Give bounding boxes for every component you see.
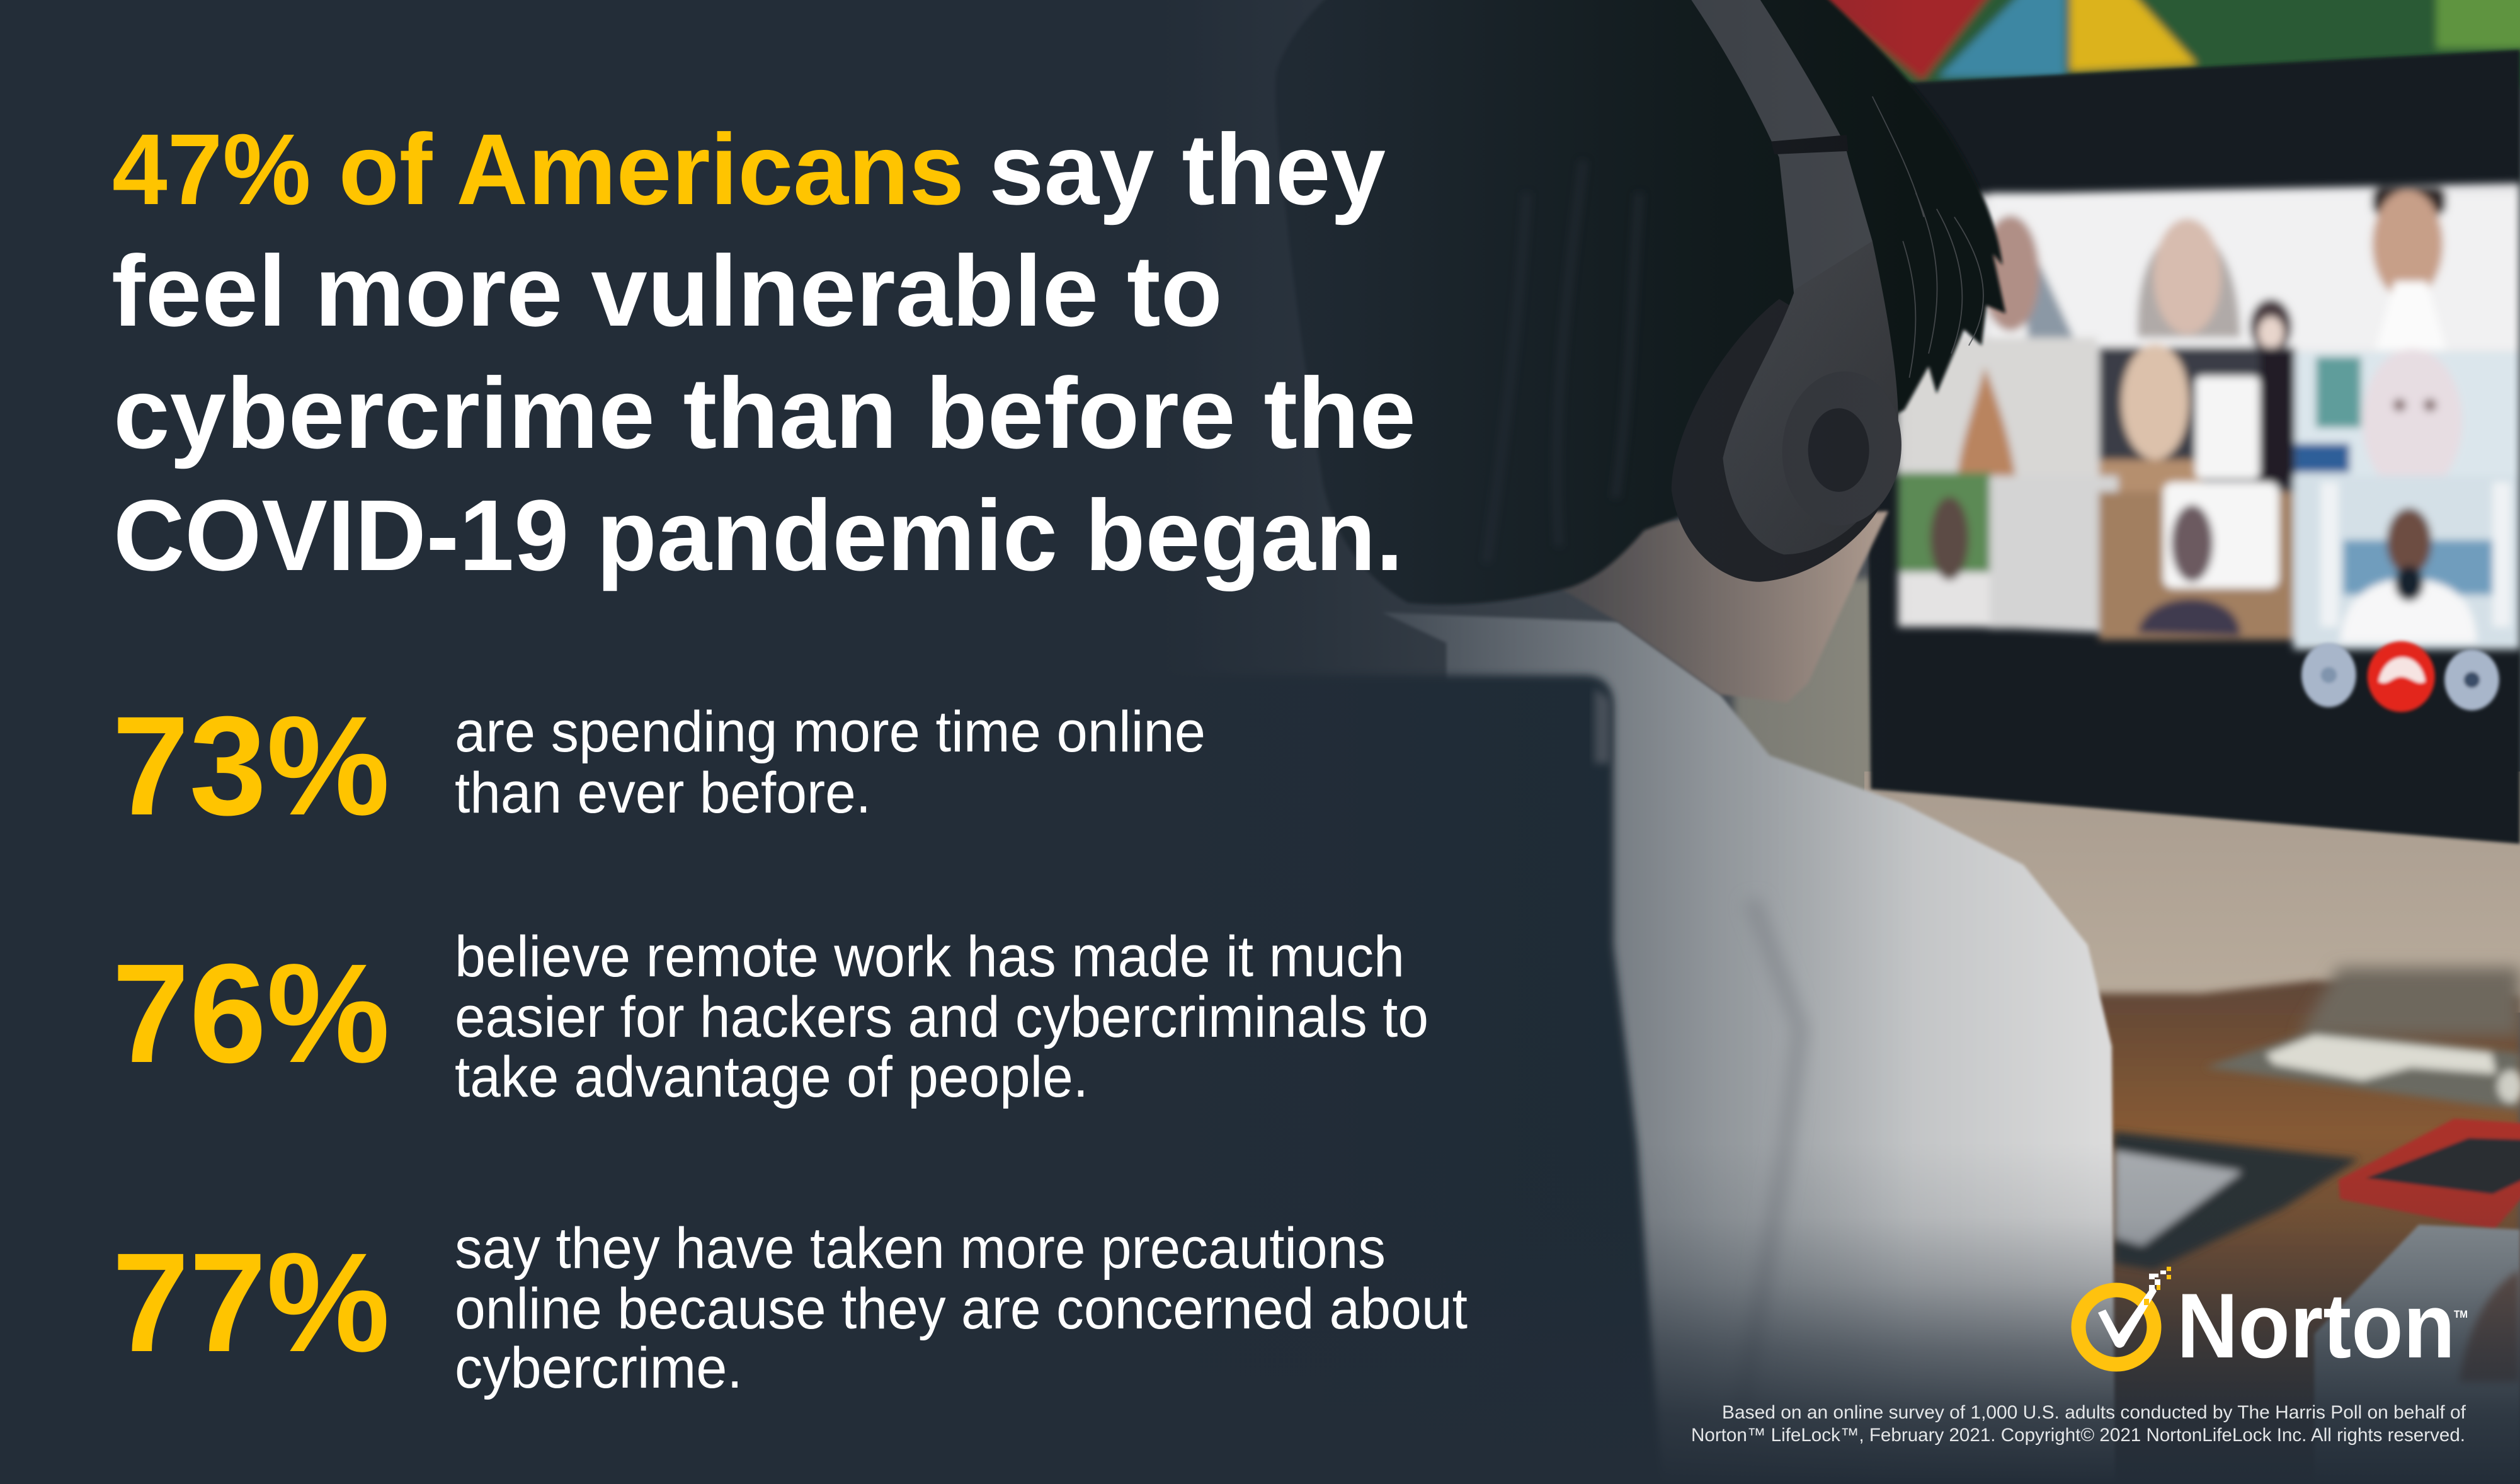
hair xyxy=(1275,0,2006,605)
source note: Based on an online survey of 1,000 U.S. adults conducted by The Harris Poll on behalf of xyxy=(1722,1402,2466,1423)
ear cup body xyxy=(1723,241,1898,554)
shirt xyxy=(1382,612,2115,1483)
tray and white objects on desk xyxy=(2205,1029,2520,1110)
wall and desk below monitor xyxy=(1734,579,1895,900)
hair sheen xyxy=(1486,161,1639,562)
stat: 76% xyxy=(112,925,1428,1109)
stat description 73%: are spending more time online xyxy=(455,700,1206,764)
ear cup outer shell xyxy=(1672,299,1880,582)
monitor xyxy=(1864,50,2520,844)
stat description 76% xyxy=(455,925,1428,1109)
stat description 76%: believe remote work has made it much xyxy=(455,925,1405,989)
neck xyxy=(1543,511,1888,702)
title: say they xyxy=(989,113,1386,225)
stat description 77%: online because they are concerned about xyxy=(455,1277,1468,1341)
stat number 73%: 73% xyxy=(112,687,390,845)
trademark: TM xyxy=(2454,1308,2468,1320)
stat description 73% xyxy=(455,700,1206,825)
title xyxy=(111,113,1416,591)
colourful wall art above monitor xyxy=(1808,0,2520,87)
source note xyxy=(1691,1402,2466,1446)
wordmark: Norton xyxy=(2177,1274,2455,1377)
stat number 76%: 76% xyxy=(112,935,390,1092)
stat: 73% xyxy=(112,687,1206,845)
stat number 77%: 77% xyxy=(112,1224,390,1381)
stat description 77%: say they have taken more precautions xyxy=(455,1216,1386,1281)
title: 47% of Americans xyxy=(112,113,964,225)
tablet on desk xyxy=(2314,1224,2520,1483)
stat: 77% xyxy=(112,1216,1468,1400)
stat description 77%: cybercrime. xyxy=(455,1336,743,1400)
headband joint xyxy=(1771,135,1848,154)
hair strands xyxy=(1873,96,1983,378)
video-call control buttons xyxy=(2301,641,2499,712)
chair rim highlight xyxy=(1594,688,1611,763)
stat description 77% xyxy=(455,1216,1468,1400)
hand at edge of desk xyxy=(2459,1270,2520,1382)
stat description 73%: than ever before. xyxy=(455,761,871,825)
stat description 76%: easier for hackers and cybercriminals to xyxy=(455,985,1428,1049)
ear cup centre xyxy=(1808,408,1869,492)
icon: yellow ring with check mark xyxy=(2078,1267,2171,1364)
shirt folds xyxy=(1736,900,1800,1447)
red phone xyxy=(2339,1119,2520,1230)
room wall behind person xyxy=(1093,0,2520,1483)
title: feel more vulnerable to xyxy=(111,234,1223,347)
source note: Norton™ LifeLock™, February 2021. Copyright© 2021 NortonLifeLock Inc. All rights reserved. xyxy=(1691,1425,2465,1446)
stat description 76%: take advantage of people. xyxy=(455,1045,1088,1109)
photo: person with headphones on a video call xyxy=(1093,0,2520,1483)
headband xyxy=(1686,0,1893,370)
headphones xyxy=(1672,0,1908,582)
keyboard mat and keyboard xyxy=(2113,1131,2359,1270)
Norton logo xyxy=(2078,1267,2468,1377)
ear cup ring xyxy=(1776,367,1908,530)
chair back xyxy=(1109,675,1662,1483)
title: cybercrime than before the xyxy=(113,357,1416,469)
video-call screen with participant tiles xyxy=(1896,183,2520,649)
title: COVID-19 pandemic began. xyxy=(113,479,1403,591)
